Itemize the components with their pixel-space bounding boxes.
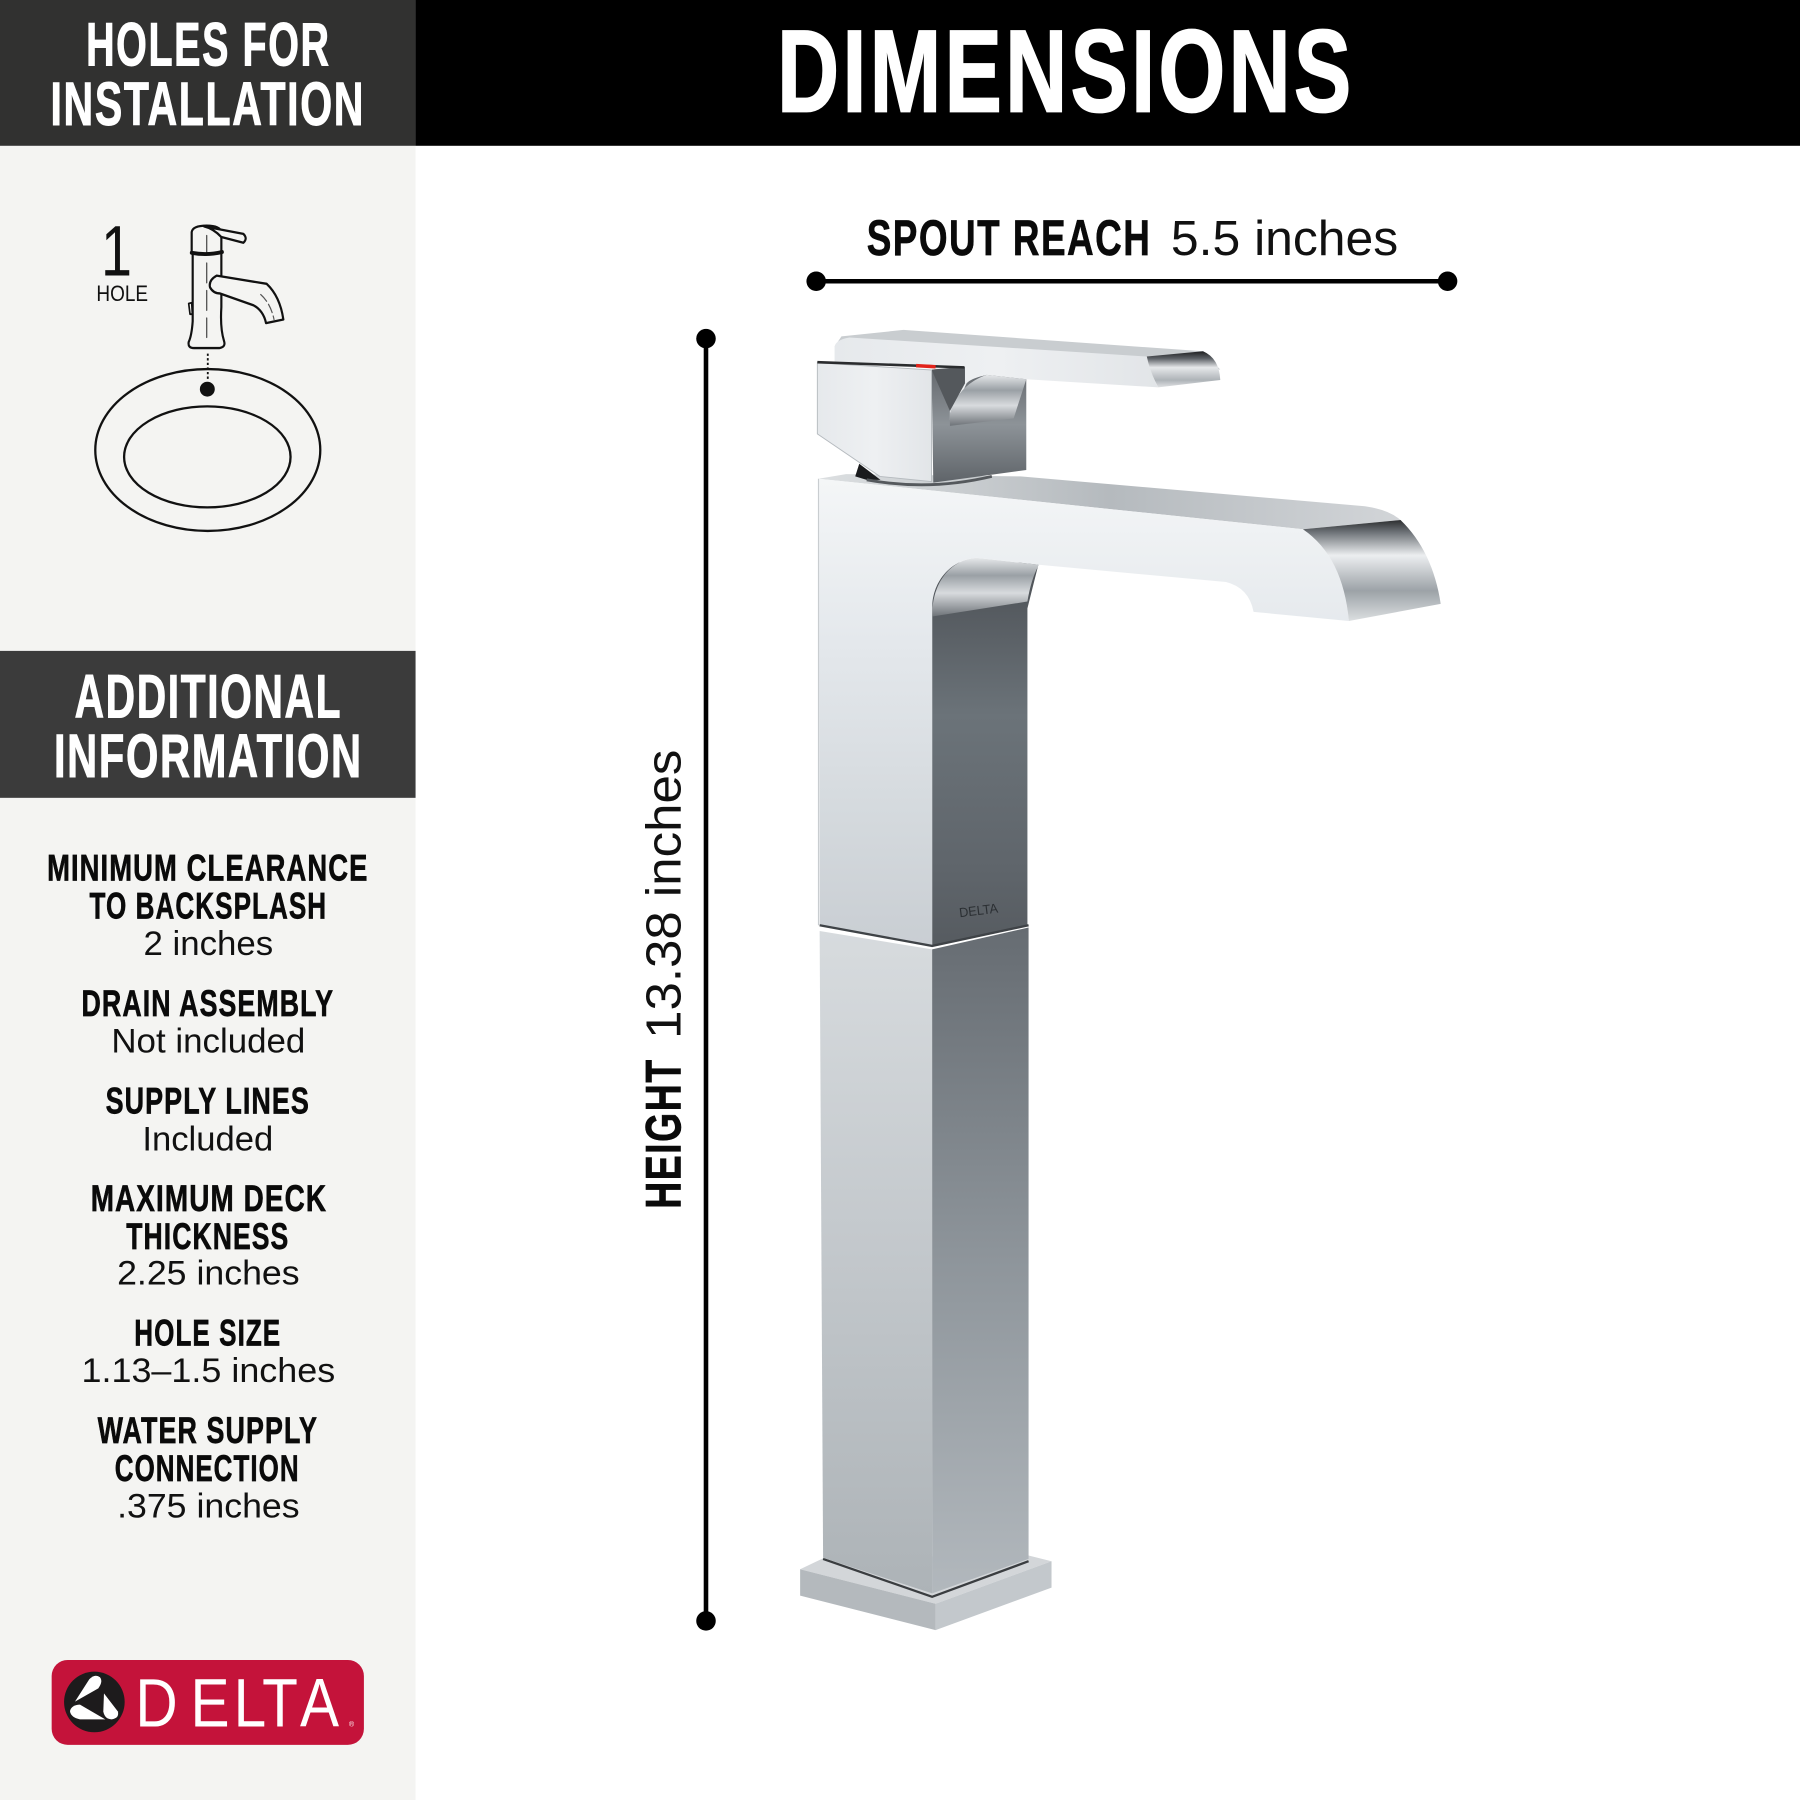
faucet upper column and spout — [818, 474, 1441, 946]
faucet lever handle — [835, 330, 1220, 426]
spec: maximum deck thickness: THICKNESS — [126, 1216, 289, 1257]
spec: hole size — [82, 1312, 335, 1390]
spec: supply lines: Included — [142, 1120, 273, 1158]
dimension: spout reach: 5.5 inches — [1171, 211, 1398, 266]
left sidebar panel — [0, 146, 416, 1800]
title banner: dimensions: DIMENSIONS — [777, 5, 1355, 136]
dimension: height: HEIGHT — [635, 1058, 692, 1209]
spec: water supply connection: .375 inches — [117, 1488, 300, 1526]
heading: holes for installation — [0, 0, 416, 146]
spec: hole size: 1.13–1.5 inches — [82, 1352, 335, 1390]
spec: supply lines: SUPPLY LINES — [106, 1081, 310, 1122]
faucet neck — [855, 464, 992, 485]
spec: minimum clearance: 2 inches — [143, 925, 273, 963]
spec: minimum clearance: MINIMUM CLEARANCE — [47, 847, 368, 888]
heading: holes for installation: HOLES FOR — [86, 10, 331, 78]
faucet lower column — [820, 928, 1029, 1593]
heading: additional information — [0, 651, 416, 798]
faucet base plate — [800, 1555, 1052, 1630]
logo: Delta brand: ® — [349, 1721, 354, 1729]
logo: Delta brand: DELTA — [135, 1664, 339, 1742]
faucet logo mark: DELTA — [958, 901, 999, 920]
spec: water supply connection — [98, 1410, 318, 1526]
spec: drain assembly: Not included — [111, 1023, 305, 1061]
faucet handle block side — [932, 367, 1026, 483]
spec: water supply connection: CONNECTION — [115, 1448, 300, 1489]
spec: minimum clearance: TO BACKSPLASH — [90, 885, 327, 926]
heading: holes for installation: INSTALLATION — [51, 70, 365, 138]
heading: additional information: ADDITIONAL — [75, 662, 342, 730]
icon: faucet line drawing — [189, 226, 283, 348]
spec: maximum deck thickness: MAXIMUM DECK — [91, 1178, 327, 1219]
title banner: dimensions — [416, 0, 1800, 146]
spec: supply lines — [106, 1081, 310, 1158]
icon: one hole count: 1 — [101, 213, 132, 292]
spec: hole size: HOLE SIZE — [134, 1312, 281, 1353]
faucet handle block front — [817, 362, 964, 482]
icon: one hole count — [96, 213, 148, 306]
spec: drain assembly: DRAIN ASSEMBLY — [82, 983, 334, 1024]
faucet illustration — [800, 330, 1441, 1630]
dimension: height — [635, 329, 716, 1631]
spec: maximum deck thickness — [91, 1178, 327, 1293]
spec: drain assembly — [82, 983, 334, 1061]
spec: minimum clearance — [47, 847, 368, 963]
heading: additional information: INFORMATION — [54, 722, 363, 790]
logo: Delta brand — [52, 1660, 364, 1745]
spec: water supply connection: WATER SUPPLY — [98, 1410, 318, 1451]
icon: one hole count: HOLE — [96, 281, 148, 306]
dimension: height: 13.38 inches — [637, 750, 692, 1039]
spec: maximum deck thickness: 2.25 inches — [117, 1255, 300, 1293]
dimension: spout reach — [806, 209, 1457, 291]
icon: sink with hole — [95, 354, 320, 531]
dimension: spout reach: SPOUT REACH — [867, 209, 1151, 266]
